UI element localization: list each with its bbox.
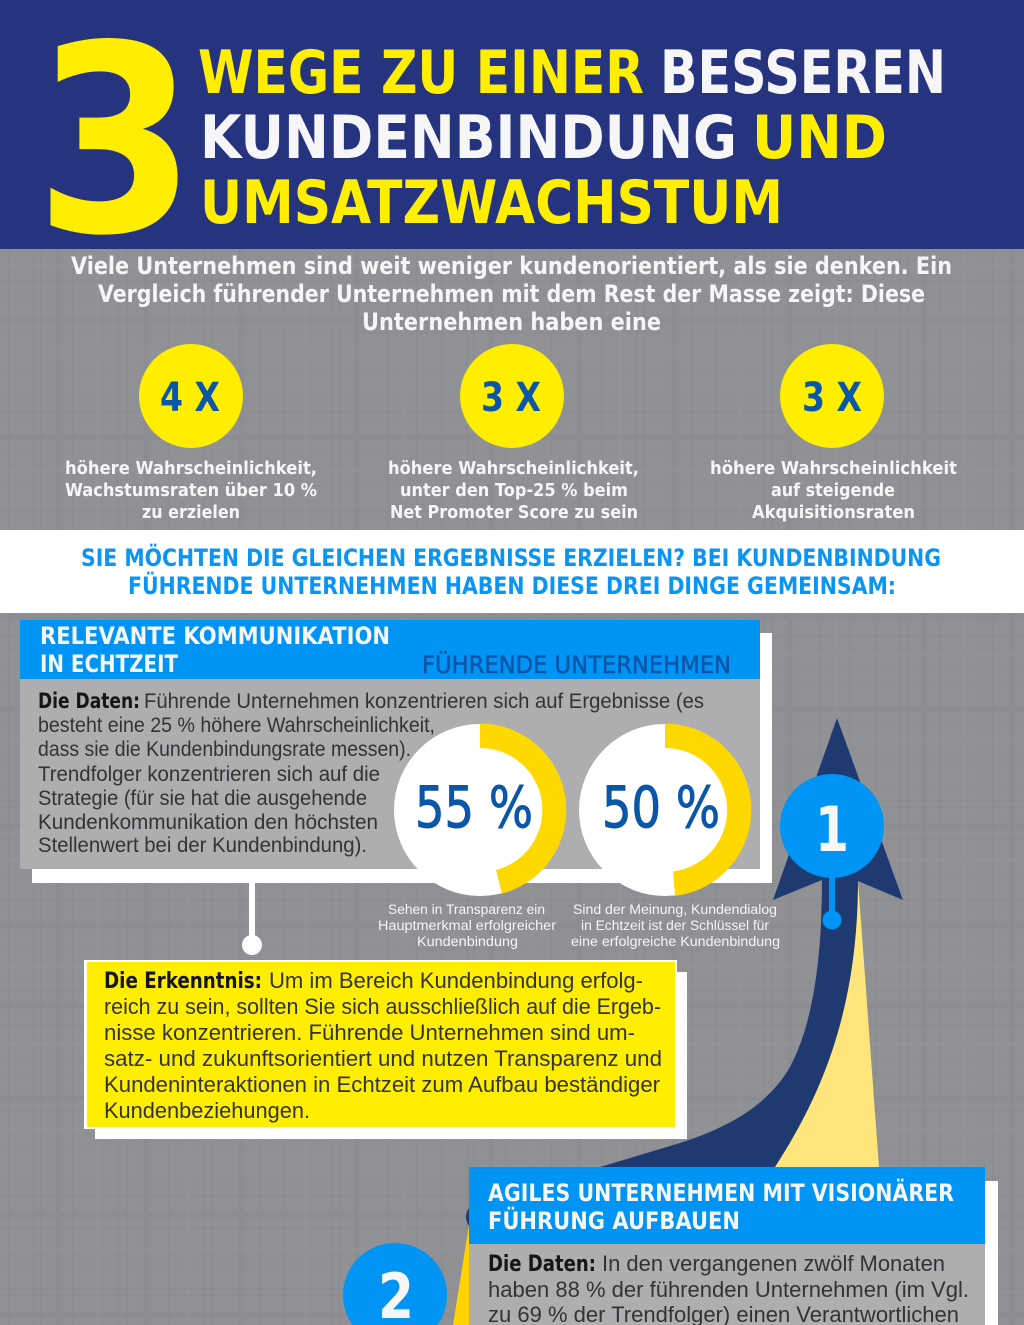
stat: 3 X acquisition: höhere Wahrscheinlichkeit	[710, 458, 957, 479]
panel 1 body text: Die Daten:	[38, 689, 140, 713]
panel 1 body text: Stellenwert bei der Kundenbindung).	[38, 834, 367, 857]
number badge 2	[343, 1243, 447, 1325]
title: BESSEREN	[660, 38, 946, 108]
insight callout: satz- und zukunftsorientiert und nutzen Transparenz und	[104, 1046, 662, 1071]
panel 2 heading: AGILES UNTERNEHMEN MIT VISIONÄRER	[488, 1178, 954, 1207]
donut caption: 55 %	[378, 902, 557, 949]
panel 1 heading: IN ECHTZEIT	[40, 650, 179, 678]
stat: 3 X acquisition: 3 X	[802, 375, 862, 421]
pale light beam	[775, 881, 879, 1167]
insight callout: Kundenbeziehungen.	[104, 1098, 310, 1123]
header banner	[0, 0, 1024, 293]
intro text	[71, 252, 952, 336]
stat: 3 X acquisition: Akquisitionsraten	[752, 502, 915, 523]
panel 1 body text: Strategie (für sie hat die ausgehende	[38, 787, 367, 810]
panel 1 heading: RELEVANTE KOMMUNIKATION	[40, 622, 390, 650]
number badge 1: 1	[815, 793, 849, 866]
donut chart: 50 %: 50 %	[602, 775, 720, 841]
panel 1: communication	[20, 620, 772, 883]
insight callout: Kundeninteraktionen in Echtzeit zum Aufbau beständiger	[104, 1072, 660, 1097]
panel 2 body text: haben 88 % der führenden Unternehmen (im Vgl.	[488, 1277, 969, 1302]
donut caption: 55 %: Hauptmerkmal erfolgreicher	[378, 918, 557, 933]
panel 1 heading	[40, 622, 390, 678]
panel 1 body text	[38, 689, 704, 857]
donut caption: 55 %: Kundenbindung	[417, 934, 518, 949]
big numeral 3: 3	[35, 0, 196, 293]
insight callout	[84, 960, 687, 1139]
stat: 3 X top-25	[388, 344, 639, 523]
donut caption: 50 %	[571, 902, 780, 949]
stat: 4 X: höhere Wahrscheinlichkeit,	[65, 458, 317, 479]
insight callout: reich zu sein, sollten Sie sich ausschließlich auf die Ergeb-	[104, 994, 661, 1019]
white call-to-action band	[0, 530, 1024, 613]
panel 2 heading	[488, 1178, 954, 1235]
stat: 3 X acquisition: auf steigende	[771, 480, 895, 501]
donut caption: 55 %: Sehen in Transparenz ein	[388, 902, 545, 917]
title: UMSATZWACHSTUM	[200, 168, 783, 238]
title: KUNDENBINDUNG	[200, 103, 737, 173]
panel 1 body text: dass sie die Kundenbindungsrate messen).	[38, 738, 411, 761]
growth arrow	[600, 718, 903, 1167]
panel 2 body text: In den vergangenen zwölf Monaten	[602, 1251, 945, 1276]
donut chart: 55 %	[394, 724, 566, 896]
stat: 3 X top-25: unter den Top-25 % beim	[400, 480, 628, 501]
panel 1 body text: Kundenkommunikation den höchsten	[38, 811, 378, 834]
title: WEGE ZU EINER	[198, 38, 644, 108]
donut chart: 55 %: 55 %	[415, 775, 533, 841]
white call-to-action band: FÜHRENDE UNTERNEHMEN HABEN DIESE DREI DINGE GEMEINSAM:	[128, 570, 896, 600]
donut caption: 50 %: eine erfolgreiche Kundenbindung	[571, 934, 780, 949]
panel 1 body text: Führende Unternehmen konzentrieren sich auf Ergebnisse (es	[144, 690, 704, 713]
stat: 3 X acquisition	[710, 344, 957, 523]
stat: 4 X: Wachstumsraten über 10 %	[65, 480, 317, 501]
stat: 3 X top-25: höhere Wahrscheinlichkeit,	[388, 458, 639, 479]
stat: 4 X: zu erzielen	[142, 502, 240, 523]
donut chart: 50 %	[579, 724, 751, 896]
number badge 1	[780, 774, 884, 930]
insight callout: Um im Bereich Kundenbindung erfolg-	[269, 968, 643, 993]
insight callout: nisse konzentrieren. Führende Unternehmen sind um-	[104, 1020, 635, 1045]
panel 2 heading: FÜHRUNG AUFBAUEN	[488, 1205, 740, 1235]
intro text: Unternehmen haben eine	[362, 308, 661, 336]
panel 1 body text: besteht eine 25 % höhere Wahrscheinlichkeit,	[38, 714, 435, 737]
leaders label: FÜHRENDE UNTERNEHMEN	[422, 650, 731, 679]
insight callout: Die Erkenntnis:	[104, 969, 262, 994]
panel 2 body text: Die Daten:	[488, 1251, 596, 1277]
title	[198, 38, 946, 238]
donut caption: 50 %: Sind der Meinung, Kundendialog	[573, 902, 777, 917]
lower arrow segment	[453, 1202, 496, 1325]
panel 1 body text: Trendfolger konzentrieren sich auf die	[38, 763, 380, 786]
stat: 4 X: 4 X	[160, 375, 220, 421]
donut caption: 50 %: in Echtzeit ist der Schlüssel für	[581, 918, 770, 933]
stat: 3 X top-25: Net Promoter Score zu sein	[390, 502, 638, 523]
title: UND	[752, 103, 887, 173]
panel 2 body text	[488, 1251, 969, 1325]
panel 2: agile leadership	[469, 1167, 998, 1325]
stat: 3 X top-25: 3 X	[481, 375, 541, 421]
stat: 4 X	[65, 344, 317, 523]
connector to insight box	[242, 883, 262, 955]
